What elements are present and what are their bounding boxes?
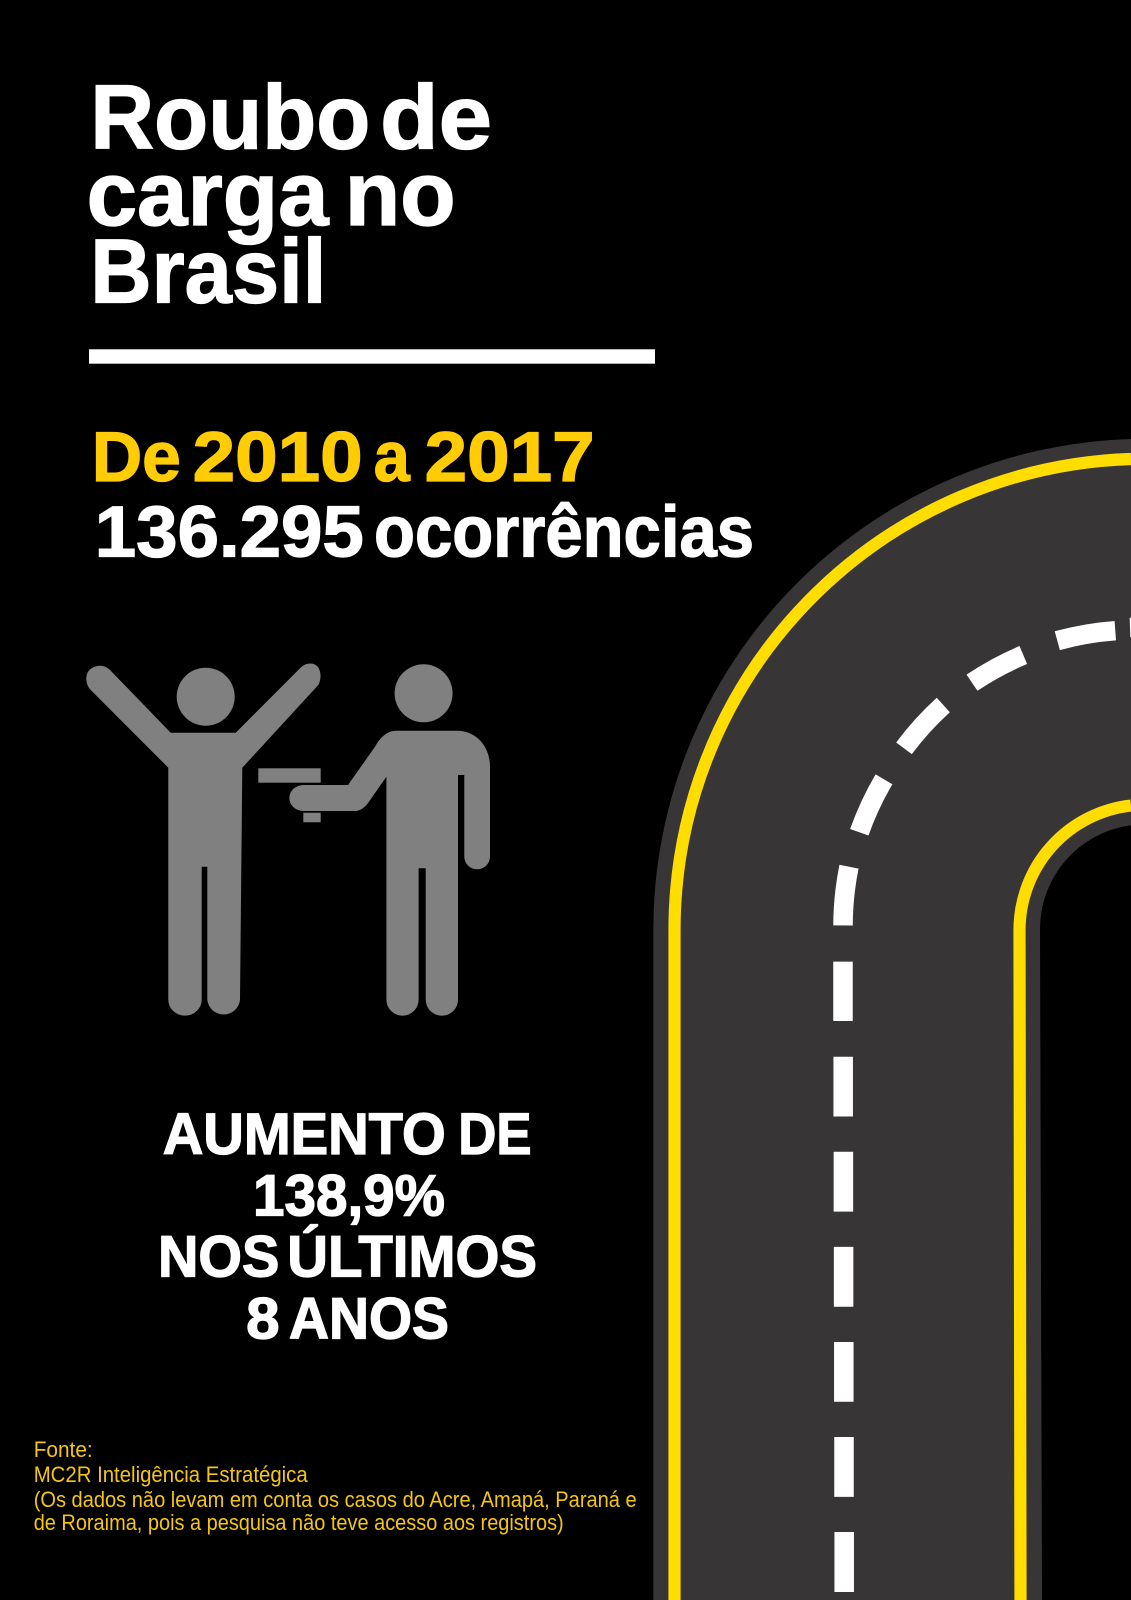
icon: robbery pictogram (86, 664, 490, 1016)
period heading: a (374, 418, 410, 497)
source note: (Os dados não levam em conta os casos do Acre, Amapá, Paraná e (34, 1487, 637, 1512)
increase statistic: 138,9% (253, 1164, 445, 1229)
occurrences count (95, 493, 754, 573)
period heading: De (92, 418, 181, 497)
road surface (653, 439, 1131, 1600)
increase statistic: ANOS (289, 1286, 449, 1351)
title: de (380, 67, 492, 168)
occurrences count: 136.295 (95, 493, 364, 573)
outer yellow lane line (674, 459, 1131, 1600)
increase statistic: 8 (246, 1286, 280, 1351)
title: no (345, 144, 456, 245)
title: Roubo (90, 67, 370, 168)
occurrences count: ocorrências (374, 493, 754, 573)
source note (34, 1437, 637, 1535)
inner yellow lane line (1020, 806, 1131, 1600)
icon: robber pointing (289, 664, 490, 1016)
increase statistic (158, 1102, 537, 1351)
title: carga (87, 144, 330, 245)
source note: de Roraima, pois a pesquisa não teve acesso aos registros) (34, 1510, 564, 1535)
period heading: 2017 (425, 418, 595, 497)
road illustration (653, 439, 1131, 1600)
title divider (89, 349, 655, 364)
increase statistic: DE (458, 1102, 532, 1167)
title: Brasil (90, 221, 326, 322)
increase statistic: ÚLTIMOS (287, 1225, 537, 1290)
source note: MC2R Inteligência Estratégica (34, 1462, 308, 1487)
period heading (92, 418, 595, 497)
increase statistic: NOS (158, 1225, 279, 1290)
increase statistic: AUMENTO (163, 1102, 446, 1167)
icon: gun (258, 768, 321, 822)
icon: victim with raised arms (86, 664, 321, 1016)
source note: Fonte: (34, 1437, 93, 1462)
period heading: 2010 (193, 418, 363, 497)
white center dashes (843, 627, 1131, 1592)
title (87, 67, 492, 322)
